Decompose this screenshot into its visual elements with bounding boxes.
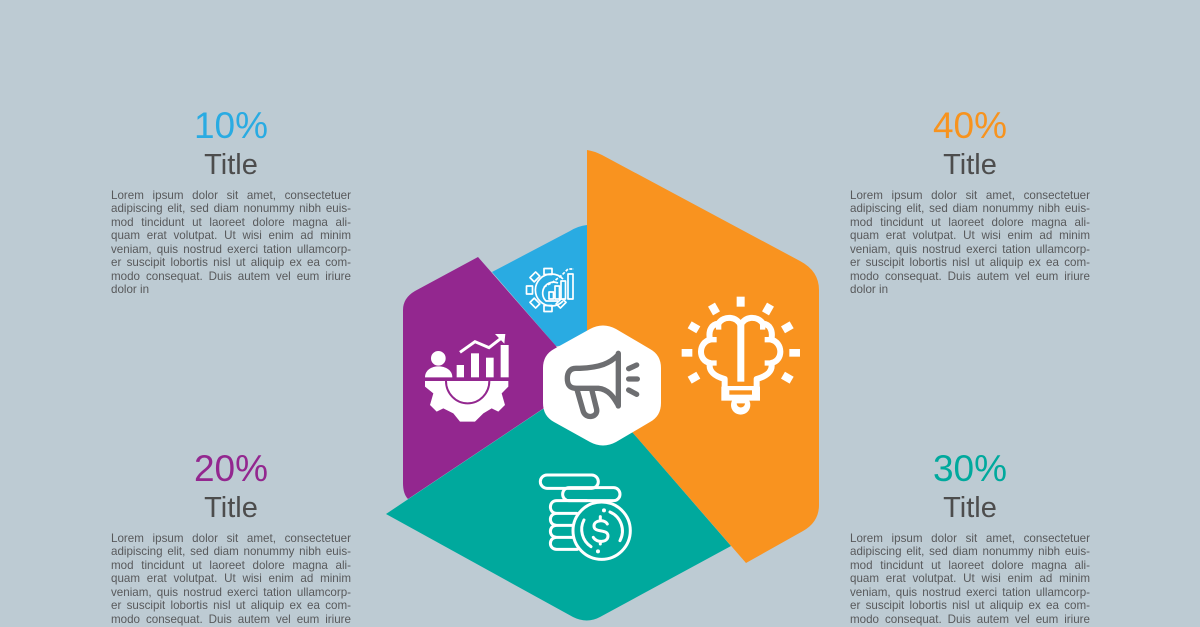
body text: modo consequat. Duis autem vel eum iriure (850, 613, 1090, 626)
body text: er suscipit lobortis nisl ut aliquip ex ea com- (111, 256, 351, 269)
body text: mod tincidunt ut laoreet dolore magna ali- (111, 216, 351, 229)
body text: er suscipit lobortis nisl ut aliquip ex ea com- (111, 599, 351, 612)
body text: quam erat volutpat. Ut wisi enim ad minim (850, 229, 1090, 242)
segment: purple 20% (403, 257, 570, 499)
body text: quam erat volutpat. Ut wisi enim ad minim (850, 572, 1090, 585)
body text: adipiscing elit, sed diam nonummy nibh euis- (850, 202, 1090, 215)
icon: megaphone (567, 353, 637, 416)
section: 10% text block (111, 105, 351, 296)
body text: dolor in (111, 283, 149, 296)
segment: teal 30% (386, 400, 731, 620)
center hexagon (543, 326, 661, 446)
body text: adipiscing elit, sed diam nonummy nibh euis- (111, 545, 351, 558)
section: 20% text block (111, 449, 351, 626)
body text: modo consequat. Duis autem vel eum iriure (850, 270, 1090, 283)
body text (850, 189, 1090, 296)
body text: modo consequat. Duis autem vel eum iriure (111, 613, 351, 626)
body text: quam erat volutpat. Ut wisi enim ad minim (111, 229, 351, 242)
percentage: 20%: 20% (194, 449, 268, 489)
icon: gear with bar chart outline (526, 268, 574, 312)
section: 40% text block (850, 105, 1090, 296)
body text: mod tincidunt ut laoreet dolore magna ali- (850, 216, 1090, 229)
body text: modo consequat. Duis autem vel eum iriure (111, 270, 351, 283)
icon: lightbulb brain (682, 297, 800, 415)
body text: Lorem ipsum dolor sit amet, consectetuer (111, 532, 351, 545)
heading: title: Title (943, 492, 997, 524)
section: 30% text block (850, 449, 1090, 626)
segment: orange 40% (587, 150, 819, 563)
body text: veniam, quis nostrud exerci tation ullamcorp- (111, 243, 351, 256)
percentage: 40%: 40% (933, 105, 1007, 146)
percentage: 30%: 30% (933, 449, 1007, 489)
heading: title: Title (204, 149, 258, 181)
body text: Lorem ipsum dolor sit amet, consectetuer (850, 189, 1090, 202)
body text: adipiscing elit, sed diam nonummy nibh euis- (850, 545, 1090, 558)
body text: dolor in (850, 283, 888, 296)
body text: mod tincidunt ut laoreet dolore magna ali- (111, 559, 351, 572)
body text: veniam, quis nostrud exerci tation ullamcorp- (111, 586, 351, 599)
body text: er suscipit lobortis nisl ut aliquip ex ea com- (850, 256, 1090, 269)
body text: mod tincidunt ut laoreet dolore magna ali- (850, 559, 1090, 572)
heading: title: Title (204, 492, 258, 524)
heading: title: Title (943, 149, 997, 181)
body text (850, 532, 1090, 626)
body text: Lorem ipsum dolor sit amet, consectetuer (850, 532, 1090, 545)
icon: coin stack (540, 475, 630, 559)
body text: adipiscing elit, sed diam nonummy nibh euis- (111, 202, 351, 215)
body text: veniam, quis nostrud exerci tation ullamcorp- (850, 243, 1090, 256)
body text (111, 189, 351, 296)
body text: veniam, quis nostrud exerci tation ullamcorp- (850, 586, 1090, 599)
segment: blue 10% (492, 225, 587, 346)
body text (111, 532, 351, 626)
body text: quam erat volutpat. Ut wisi enim ad minim (111, 572, 351, 585)
percentage: 10%: 10% (194, 105, 268, 146)
body text: Lorem ipsum dolor sit amet, consectetuer (111, 189, 351, 202)
body text: er suscipit lobortis nisl ut aliquip ex ea com- (850, 599, 1090, 612)
icon: person with chart on gear (425, 334, 509, 422)
